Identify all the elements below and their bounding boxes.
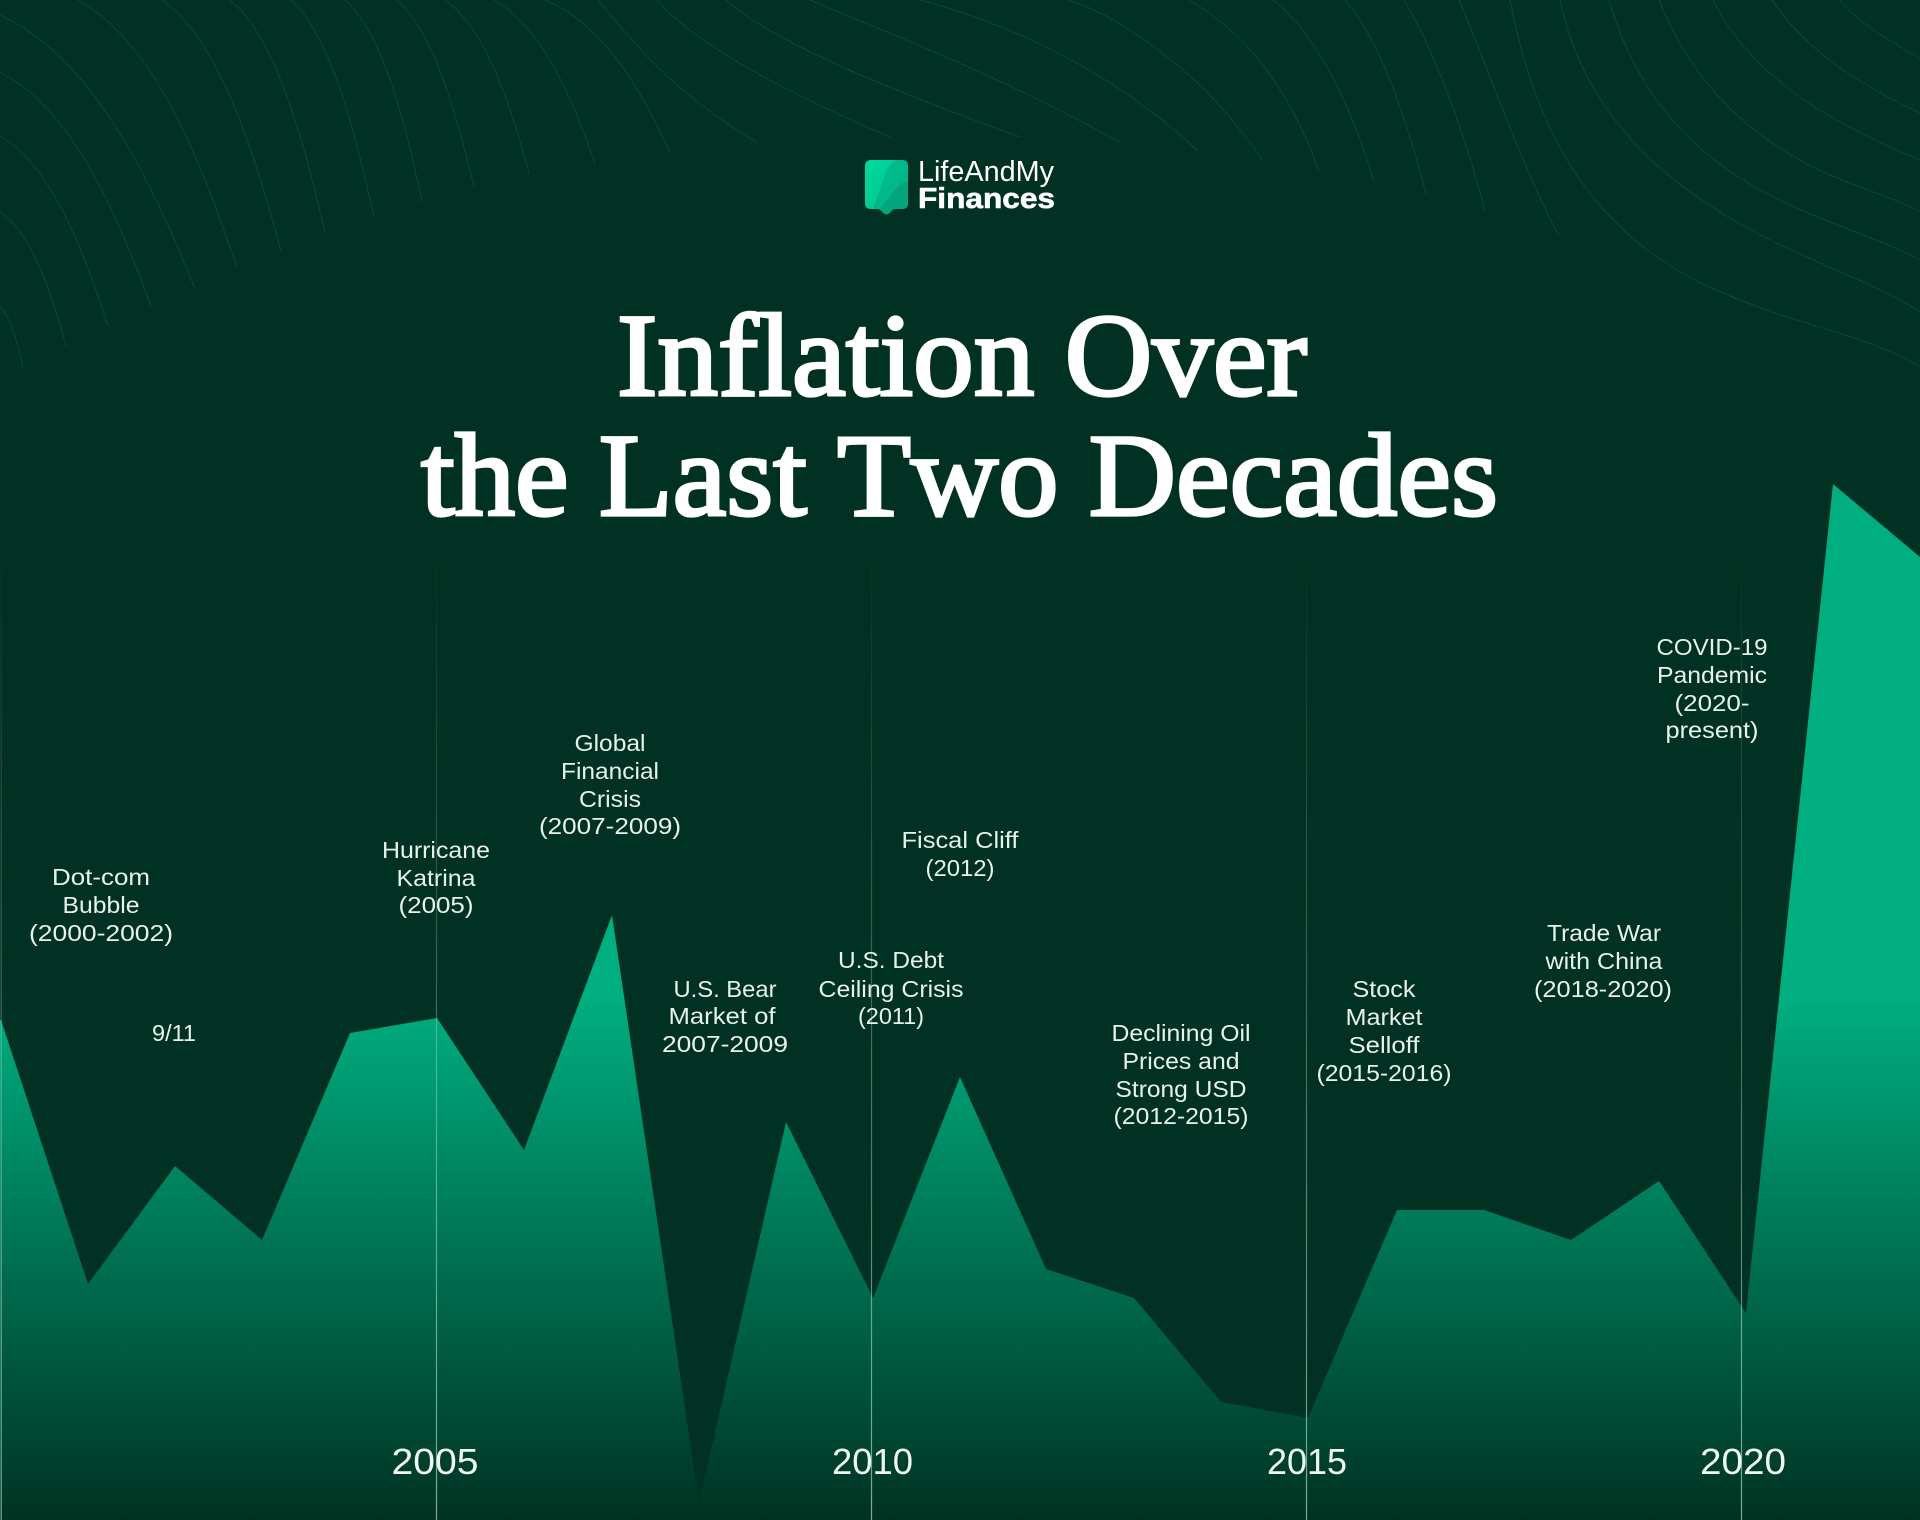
event label: Dot-com Bubble: Dot-com: [52, 864, 150, 890]
event label: Stock Market Selloff: Selloff: [1348, 1032, 1420, 1058]
event label: Fiscal Cliff: [902, 827, 1019, 881]
event label: Stock Market Selloff: [1316, 976, 1452, 1086]
x-axis year labels: 2015: [1267, 1441, 1347, 1482]
event label: Hurricane Katrina: Hurricane: [382, 837, 490, 863]
event label: Trade War with China: with China: [1544, 948, 1663, 974]
event label: Dot-com Bubble: (2000-2002): [29, 920, 173, 946]
event label: U.S. Debt Ceiling Crisis: (2011): [858, 1003, 924, 1029]
logo: LifeAndMy Finances: [865, 156, 1055, 215]
event label: Declining Oil Prices and Strong USD: Strong USD: [1116, 1076, 1246, 1102]
event label: Trade War with China: [1534, 920, 1672, 1002]
event label: Hurricane Katrina: [382, 837, 490, 918]
event label: Declining Oil Prices and Strong USD: [1112, 1020, 1250, 1129]
logo wordmark line 2: Finances: [918, 183, 1055, 215]
title: [421, 290, 1498, 541]
event label: COVID-19 Pandemic: COVID-19: [1656, 634, 1768, 660]
event label: Stock Market Selloff: (2015-2016): [1316, 1060, 1452, 1086]
logo wordmark line 1: LifeAndMy: [918, 156, 1054, 188]
area chart: inflation 2000-2021: [0, 484, 1920, 1520]
event label: Global Financial Crisis: (2007-2009): [539, 813, 681, 839]
x-axis year labels: 2005: [392, 1441, 478, 1482]
year gridlines: [1, 540, 1742, 1520]
x-axis year labels: 2020: [1700, 1441, 1786, 1482]
event label: Dot-com Bubble: Bubble: [62, 892, 140, 918]
event label: Global Financial Crisis: Global: [574, 730, 646, 756]
event label: U.S. Debt Ceiling Crisis: U.S. Debt: [838, 947, 945, 973]
event label: Global Financial Crisis: Crisis: [579, 786, 641, 812]
x-axis year labels: 2010: [832, 1441, 913, 1482]
title: the Last Two Decades: [421, 410, 1498, 541]
event label: Declining Oil Prices and Strong USD: Declining Oil: [1112, 1020, 1250, 1046]
event label: COVID-19 Pandemic: [1656, 634, 1768, 743]
event label: U.S. Bear Market: [662, 976, 788, 1057]
event label: COVID-19 Pandemic: present): [1666, 717, 1758, 743]
event label: 9/11: 9/11: [152, 1020, 196, 1046]
event label: Trade War with China: Trade War: [1547, 920, 1661, 946]
title: Inflation Over: [617, 290, 1307, 421]
event label: U.S. Bear Market: 2007-2009: [662, 1031, 788, 1057]
x-axis year labels: [392, 1441, 1786, 1482]
event label: Declining Oil Prices and Strong USD: Prices and: [1122, 1048, 1240, 1074]
event label: COVID-19 Pandemic: Pandemic: [1657, 662, 1767, 688]
event label: Trade War with China: (2018-2020): [1534, 976, 1672, 1002]
event label: Stock Market Selloff: Stock: [1352, 976, 1416, 1002]
event label: U.S. Debt Ceiling Crisis: [818, 947, 964, 1029]
event label: Global Financial Crisis: [539, 730, 681, 839]
event label: U.S. Bear Market: U.S. Bear: [674, 976, 777, 1002]
icon: logo mark: [865, 160, 908, 214]
event label: Dot-com Bubble: [29, 864, 173, 946]
event label: Fiscal Cliff: Fiscal Cliff: [902, 827, 1019, 853]
event label: Hurricane Katrina: Katrina: [396, 865, 476, 891]
event label: Declining Oil Prices and Strong USD: (2012-2015): [1114, 1103, 1248, 1129]
event label: U.S. Debt Ceiling Crisis: Ceiling Crisis: [818, 976, 964, 1002]
event label: Hurricane Katrina: (2005): [398, 892, 474, 918]
event label: U.S. Bear Market: Market of: [668, 1003, 776, 1029]
event label: Fiscal Cliff: (2012): [926, 855, 994, 881]
event label: Stock Market Selloff: Market: [1346, 1004, 1423, 1030]
event label: Global Financial Crisis: Financial: [561, 758, 659, 784]
event label: COVID-19 Pandemic: (2020-: [1674, 690, 1750, 716]
